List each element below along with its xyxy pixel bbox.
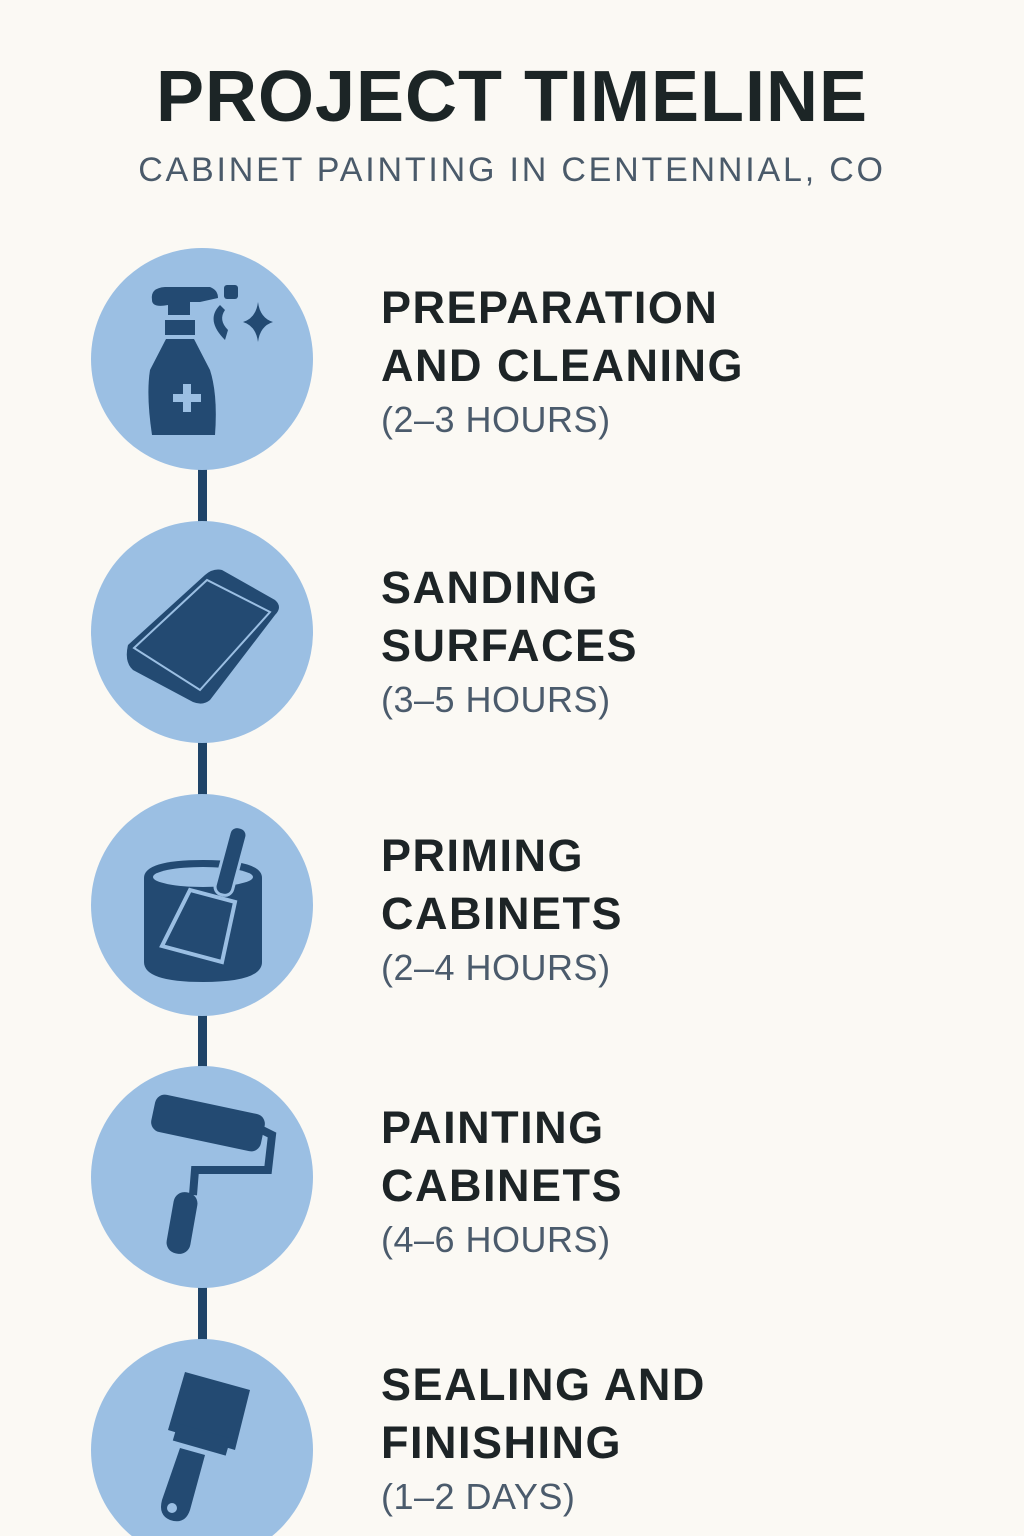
step 5 text: (1–2 DAYS) xyxy=(381,1476,575,1517)
icon: sanding sponge xyxy=(91,521,313,743)
step 4 text: PAINTING xyxy=(381,1102,605,1153)
step 2 text: SANDING xyxy=(381,562,599,613)
step 4 text xyxy=(381,1102,623,1260)
step 1 text: PREPARATION xyxy=(381,282,718,333)
icon: primer can and brush xyxy=(91,794,313,1016)
subtitle: CABINET PAINTING IN CENTENNIAL, CO xyxy=(138,151,886,189)
step 1 text: AND CLEANING xyxy=(381,340,744,391)
step 2 text: (3–5 HOURS) xyxy=(381,679,611,720)
step 3 text: (2–4 HOURS) xyxy=(381,947,611,988)
step 3 text xyxy=(381,830,623,988)
step 4 text: (4–6 HOURS) xyxy=(381,1219,611,1260)
step 2 text xyxy=(381,562,638,720)
icon: paint roller xyxy=(91,1066,313,1288)
step 2 text: SURFACES xyxy=(381,620,638,671)
icon: paint brush xyxy=(91,1339,313,1536)
step 1 text: (2–3 HOURS) xyxy=(381,399,611,440)
step 5 text: FINISHING xyxy=(381,1417,622,1468)
step 3 text: CABINETS xyxy=(381,888,623,939)
icon: spray bottle xyxy=(91,248,313,470)
step 4 text: CABINETS xyxy=(381,1160,623,1211)
step 5 text xyxy=(381,1359,706,1517)
step 5 text: SEALING AND xyxy=(381,1359,706,1410)
step 1 text xyxy=(381,282,744,440)
step 3 text: PRIMING xyxy=(381,830,584,881)
connector line xyxy=(198,360,207,1460)
title: PROJECT TIMELINE xyxy=(156,57,868,137)
